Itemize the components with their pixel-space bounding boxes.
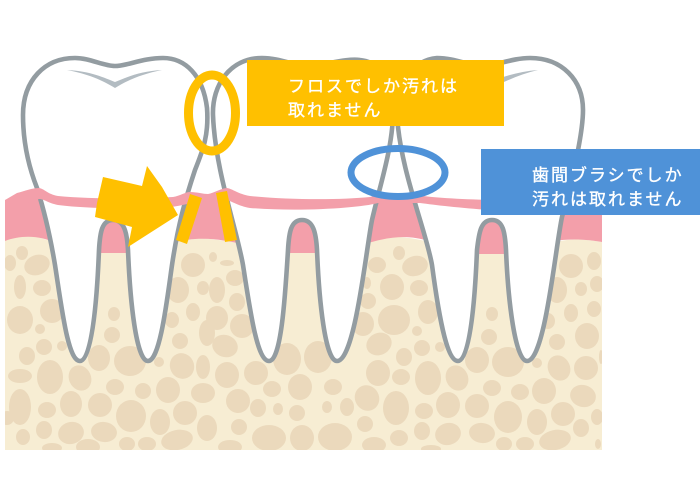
floss strip left bbox=[176, 194, 202, 244]
floss strip right bbox=[216, 191, 237, 242]
bone background bbox=[5, 236, 602, 450]
callout: floss bbox=[247, 60, 504, 126]
callout: interdental brush: 歯間ブラシでしか bbox=[532, 165, 684, 185]
arrow pointing to gap bbox=[95, 166, 178, 247]
callout: interdental brush: 汚れは取れません bbox=[532, 190, 684, 209]
illustration: teeth cross-section with callouts bbox=[5, 56, 700, 450]
yellow ring: contact point bbox=[188, 75, 236, 151]
tooth crown creases bbox=[67, 70, 538, 88]
callout: floss: フロスでしか汚れは bbox=[288, 77, 459, 96]
tooth fills bbox=[23, 58, 583, 361]
callout: floss: 取れません bbox=[288, 101, 382, 120]
callout: interdental brush bbox=[481, 149, 700, 215]
bone texture blobs bbox=[0, 246, 604, 455]
gum line band bbox=[5, 188, 490, 210]
blue ring: interdental gap bbox=[351, 148, 445, 196]
tooth outlines bbox=[23, 58, 583, 361]
gum pockets bbox=[5, 195, 602, 254]
